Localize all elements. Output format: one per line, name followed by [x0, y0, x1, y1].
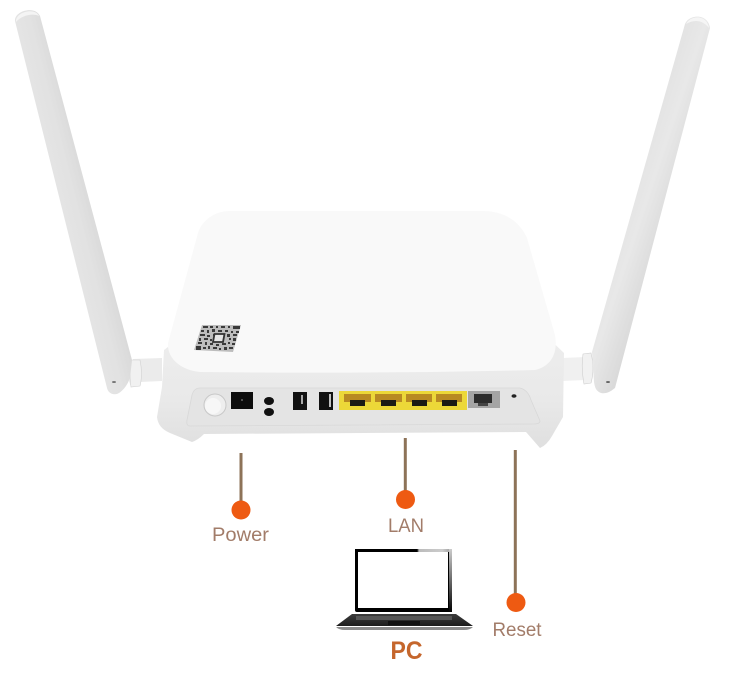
label: PC: PC [390, 637, 422, 665]
icon: laptop [336, 549, 473, 630]
body top cover [168, 211, 556, 373]
left antenna [15, 10, 162, 394]
port recess panel [187, 388, 540, 426]
body lower shell [157, 330, 564, 448]
reset hole [512, 394, 516, 398]
callout: Reset [492, 450, 542, 641]
callout: Power [212, 453, 270, 546]
power button [204, 394, 226, 416]
LAN ports [339, 391, 467, 410]
callout: LAN: LAN [388, 516, 424, 537]
grey phone port [468, 391, 500, 408]
callout: Reset: Reset [492, 620, 542, 641]
QR code [194, 325, 241, 352]
router body [157, 211, 564, 448]
power jack [231, 392, 253, 409]
callout: Power: Power [212, 525, 270, 546]
USB port 2 [319, 392, 333, 410]
USB port 1 [293, 392, 307, 410]
callout: LAN [388, 438, 424, 537]
indicator holes [264, 397, 274, 416]
right antenna [562, 17, 710, 393]
